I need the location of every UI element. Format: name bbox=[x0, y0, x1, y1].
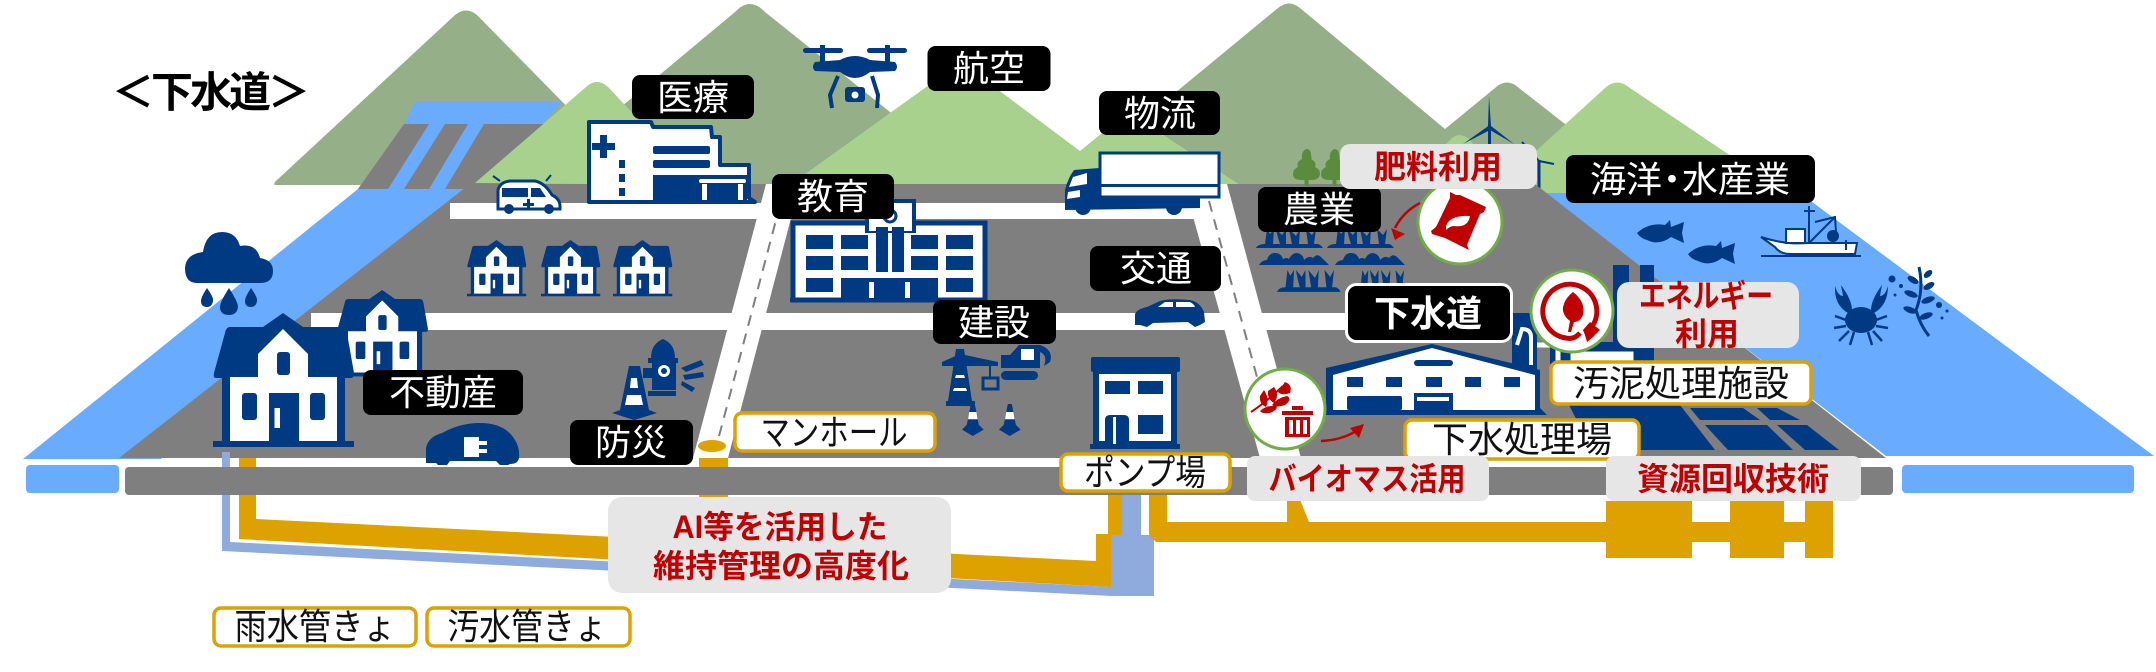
label: 交通: 交通 bbox=[1120, 248, 1192, 289]
icon: car bbox=[1135, 299, 1205, 327]
callout: エネルギー利用: 利用 bbox=[1675, 316, 1739, 352]
label: 下水処理場: 下水処理場 bbox=[1432, 419, 1612, 460]
callout: AI等を活用した維持管理の高度化: 維持管理の高度化 bbox=[653, 548, 909, 584]
callout: AI等を活用した維持管理の高度化 bbox=[608, 497, 951, 593]
label: 防災: 防災 bbox=[595, 422, 667, 463]
icon: excavator bbox=[1001, 345, 1051, 380]
label: 農業: 農業 bbox=[1283, 189, 1355, 230]
label: 教育 bbox=[772, 174, 894, 219]
label: 下水道 bbox=[1346, 284, 1512, 342]
callout: 資源回収技術: 資源回収技術 bbox=[1637, 461, 1829, 497]
manhole bbox=[698, 440, 726, 452]
icon: rain cloud bbox=[185, 232, 273, 315]
label: 航空: 航空 bbox=[953, 48, 1025, 89]
underground pipes bbox=[222, 452, 1833, 596]
label: 海洋・水産業 bbox=[1566, 155, 1815, 203]
icon: crab bbox=[1834, 285, 1888, 345]
label: 医療 bbox=[632, 75, 754, 119]
label: 建設: 建設 bbox=[958, 302, 1030, 343]
callout: 肥料利用: 肥料利用 bbox=[1374, 149, 1502, 185]
label: 航空 bbox=[928, 46, 1050, 91]
label: 建設 bbox=[933, 300, 1056, 344]
icon: fertilizer circle bbox=[1391, 180, 1502, 264]
label: 海洋・水産業: 海洋・水産業 bbox=[1590, 159, 1790, 200]
icon: treatment plant bbox=[1326, 344, 1547, 415]
icon: drone bbox=[803, 45, 907, 108]
icon: school bbox=[790, 201, 987, 302]
icon: pump station bbox=[1090, 357, 1180, 449]
icon: hydrant bbox=[643, 339, 704, 396]
icon: small house 2 bbox=[541, 240, 600, 296]
title: ＜下水道＞ bbox=[112, 69, 310, 116]
label: 防災 bbox=[570, 420, 693, 465]
label: ポンプ場: ポンプ場 bbox=[1084, 452, 1206, 493]
icon: small house 1 bbox=[467, 240, 526, 296]
icon: electric car bbox=[426, 423, 519, 465]
treatment tanks bbox=[1569, 405, 1839, 450]
icon: hospital bbox=[589, 122, 755, 202]
icon: traffic cone bbox=[612, 366, 657, 420]
river bbox=[23, 82, 640, 459]
icon: small house 3 bbox=[613, 240, 672, 296]
callout: 資源回収技術 bbox=[1606, 456, 1861, 501]
icon: seaweed bbox=[1888, 267, 1948, 336]
label: 物流: 物流 bbox=[1124, 93, 1196, 134]
icon: traffic cones bbox=[962, 404, 1021, 436]
icon: ambulance bbox=[493, 175, 560, 214]
label: 不動産: 不動産 bbox=[389, 372, 497, 413]
base strip bbox=[26, 465, 2134, 495]
icon: fish bbox=[1637, 220, 1735, 264]
callout: エネルギー利用: エネルギー bbox=[1639, 278, 1773, 314]
label: 教育: 教育 bbox=[797, 176, 869, 217]
label: 物流 bbox=[1099, 91, 1220, 135]
label: 雨水管きょ: 雨水管きょ bbox=[234, 606, 396, 647]
mountains bbox=[274, 4, 1786, 193]
callout: 肥料利用 bbox=[1340, 144, 1537, 189]
label: 汚泥処理施設: 汚泥処理施設 bbox=[1573, 363, 1789, 404]
label: 下水道: 下水道 bbox=[1374, 293, 1482, 334]
label: 農業 bbox=[1258, 187, 1381, 232]
sea bbox=[1544, 193, 2154, 456]
label: マンホール: マンホール bbox=[760, 412, 908, 453]
icon: truck bbox=[1065, 153, 1219, 215]
roads bbox=[311, 184, 1551, 458]
label: 医療: 医療 bbox=[657, 77, 729, 118]
icon: large house bbox=[213, 313, 354, 447]
label: 不動産 bbox=[363, 370, 523, 415]
callout: バイオマス活用: バイオマス活用 bbox=[1268, 461, 1466, 497]
icon: sludge facility bbox=[1512, 265, 1654, 370]
callout: エネルギー利用 bbox=[1617, 278, 1799, 352]
wind turbines bbox=[1463, 96, 1554, 195]
icon: construction crane bbox=[942, 349, 998, 406]
label: 交通 bbox=[1090, 246, 1221, 291]
ground bbox=[119, 184, 1886, 458]
icon: biomass circle bbox=[1245, 369, 1364, 449]
callout: AI等を活用した維持管理の高度化: AI等を活用した bbox=[672, 509, 888, 545]
icon: crop fields bbox=[1256, 229, 1410, 292]
label: 汚水管きょ: 汚水管きょ bbox=[448, 606, 606, 647]
icon: trees bbox=[1293, 149, 1348, 186]
icon: medium house bbox=[337, 290, 428, 376]
icon: energy circle bbox=[1531, 270, 1613, 352]
icon: fishing boat bbox=[1761, 206, 1861, 257]
